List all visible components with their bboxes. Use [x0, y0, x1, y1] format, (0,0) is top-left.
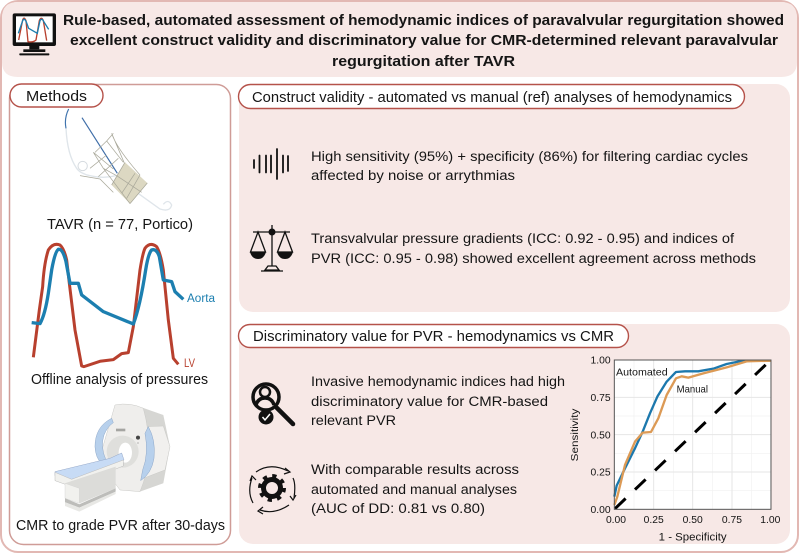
- text: pressure gradients agreement: Transvalvular pressure gradients (ICC: 0.92 - 0.95) and indices of: [311, 231, 734, 247]
- chart: aortic and LV pressure curves: [32, 244, 183, 367]
- text: sensitivity and specificity: High sensitivity (95%) + specificity (86%) for filtering cardiac cycles: [311, 149, 748, 165]
- diagonal reference line: [615, 361, 770, 509]
- label: Aorta: Aorta: [187, 293, 216, 305]
- text: pressure gradients agreement: [311, 231, 756, 267]
- panel: methods: [10, 84, 230, 544]
- x axis tick labels: 0.50: [683, 515, 703, 526]
- title: [63, 13, 784, 70]
- header banner: [2, 2, 797, 77]
- caption: CMR: CMR to grade PVR after 30-days: [16, 518, 225, 534]
- y axis tick labels: 1.00: [591, 355, 611, 366]
- text: discriminatory value: discriminatory value for CMR-based: [311, 394, 548, 410]
- x axis tick labels: 0.00: [606, 515, 626, 526]
- panel: discriminatory value: [238, 324, 790, 544]
- icon: gear with cycle arrows: [250, 467, 296, 514]
- text: comparable results: With comparable results across: [311, 462, 519, 478]
- text: discriminatory value: Invasive hemodynamic indices had high: [311, 374, 565, 390]
- x axis title: 1 - Specificity: [659, 531, 727, 543]
- text: sensitivity and specificity: [311, 149, 748, 184]
- icon: magnifier with person: [253, 384, 293, 424]
- chart: ROC curves: [570, 355, 781, 543]
- title: excellent construct validity and discriminatory value for CMR-determined relevant paravalvular: [70, 33, 778, 49]
- icon: monitor with pressure curves: [13, 13, 56, 55]
- title: Rule-based, automated assessment of hemodynamic indices of paravalvular regurgitation showed: [63, 13, 784, 29]
- image: CMR scanner: [55, 404, 170, 512]
- text: sensitivity and specificity: affected by noise or arrythmias: [311, 168, 515, 184]
- icon: balance scales: [250, 225, 293, 271]
- panel: construct validity: [238, 84, 790, 312]
- caption: offline analysis: Offline analysis of pressures: [31, 372, 208, 388]
- x axis tick labels: [606, 515, 781, 526]
- title: regurgitation after TAVR: [332, 54, 516, 70]
- text: pressure gradients agreement: PVR (ICC: 0.95 - 0.98) showed excellent agreement across methods: [311, 251, 756, 267]
- methods heading pill: Methods: [26, 88, 87, 105]
- y axis tick labels: 0.25: [591, 467, 611, 478]
- construct validity heading pill: Construct validity - automated vs manual (ref) analyses of hemodynamics: [252, 90, 732, 106]
- legend label: Manual: Manual: [677, 384, 708, 395]
- image: TAVR valve on catheter: [65, 109, 172, 210]
- discriminatory heading pill: Discriminatory value for PVR - hemodynamics vs CMR: [253, 329, 614, 345]
- curve: manual: [614, 361, 771, 505]
- y axis tick labels: 0.00: [591, 505, 611, 516]
- text: comparable results: [311, 462, 519, 517]
- y axis title: Sensitivity: [570, 408, 581, 461]
- x axis tick labels: 0.25: [644, 515, 664, 526]
- legend label: Automated: Automated: [616, 367, 668, 378]
- text: discriminatory value: [311, 374, 565, 429]
- text: discriminatory value: relevant PVR: [311, 413, 396, 429]
- y axis tick labels: 0.50: [591, 431, 611, 442]
- caption: TAVR: TAVR (n = 77, Portico): [47, 217, 193, 233]
- text: comparable results: automated and manual analyses: [311, 482, 517, 498]
- discriminatory heading pill: [238, 324, 628, 348]
- construct validity heading pill: [238, 84, 744, 108]
- x axis tick labels: 0.75: [722, 515, 742, 526]
- y axis tick labels: 0.75: [591, 393, 611, 404]
- methods heading pill: [10, 84, 103, 107]
- label: LV: LV: [184, 358, 195, 370]
- y axis tick labels: [591, 355, 611, 516]
- curve: automated: [614, 361, 771, 497]
- text: comparable results: (AUC of DD: 0.81 vs 0.80): [311, 501, 485, 517]
- x axis tick labels: 1.00: [760, 515, 781, 526]
- icon: waveform: [254, 149, 288, 179]
